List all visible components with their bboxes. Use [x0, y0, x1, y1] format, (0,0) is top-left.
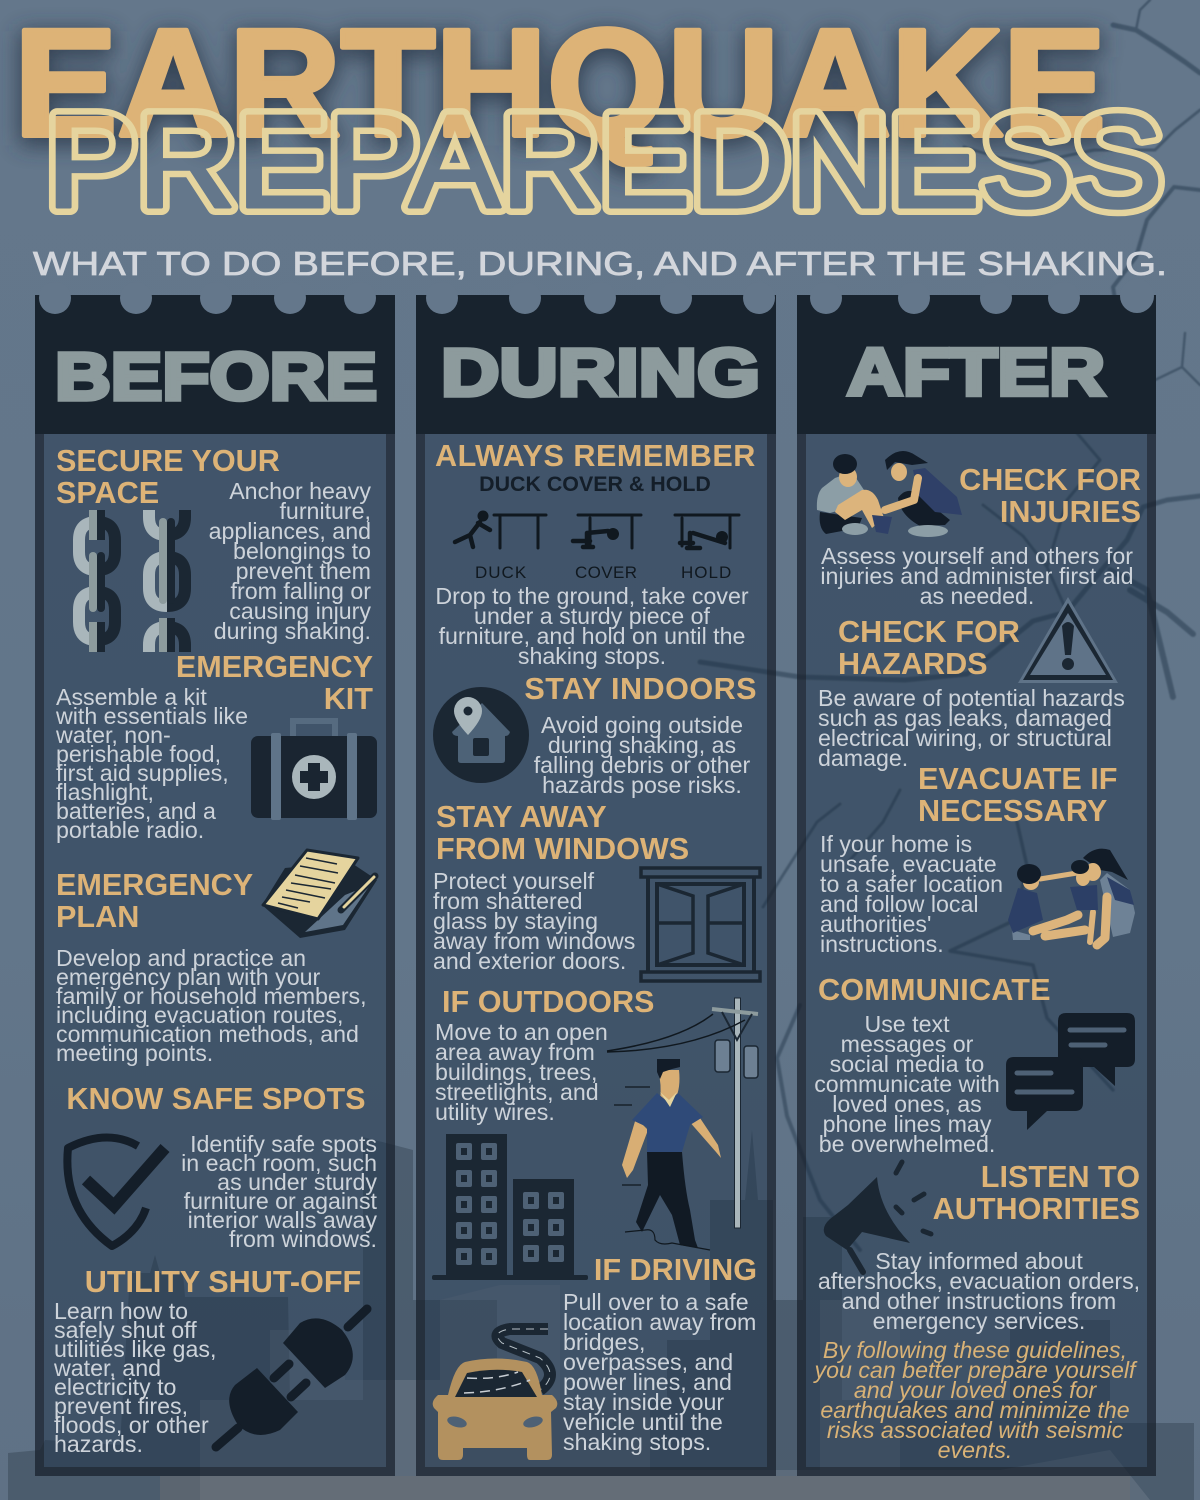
text: emergency plan: including evacuation routes, [56, 1002, 343, 1028]
text: stay indoors: Avoid going outside [541, 712, 743, 738]
text: communicate: Use text [864, 1011, 950, 1037]
text: communicate: phone lines may [823, 1111, 991, 1137]
heading: check for injuries [959, 463, 1141, 529]
text: secure your space [209, 478, 371, 644]
text: listen to authorities: emergency services. [873, 1308, 1085, 1334]
label: cover: COVER [575, 563, 637, 582]
text: know safe spots [181, 1130, 377, 1252]
text: check for injuries: as needed. [920, 583, 1034, 609]
text: if driving: stay inside your [563, 1389, 724, 1415]
icon: open window [639, 866, 762, 983]
text: emergency plan: communication methods, and [56, 1020, 359, 1046]
heading: emergency kit: KIT [324, 682, 373, 716]
text: evacuate if necessary: If your home is [820, 831, 972, 857]
icon: chains [73, 510, 191, 652]
heading: utility shut-off: UTILITY SHUT-OFF [85, 1265, 361, 1299]
text: emergency kit: first aid supplies, [56, 760, 229, 786]
text: evacuate if necessary: unsafe, evacuate [820, 851, 997, 877]
text: communicate [797, 1014, 1017, 1154]
heading: if driving: IF DRIVING [594, 1253, 757, 1287]
icon: warning triangle [1018, 597, 1118, 683]
text: if outdoors: Move to an open [435, 1019, 608, 1045]
text: emergency kit: batteries, and a [56, 798, 216, 824]
text: evacuate if necessary: authorities' [820, 911, 931, 937]
text: if outdoors: area away from [435, 1039, 595, 1065]
heading: emergency plan: PLAN [56, 900, 139, 934]
text: utility shut-off: floods, or other [54, 1412, 209, 1438]
text: check for injuries: injuries and administer first aid [820, 563, 1134, 589]
text: closing note: By following these guidelines, [823, 1337, 1127, 1363]
text: stay away from windows: glass by staying [433, 908, 598, 934]
text: if outdoors [435, 1019, 608, 1125]
text: check for hazards: Be aware of potential hazards [818, 685, 1125, 711]
text: if outdoors: streetlights, and [435, 1079, 599, 1105]
text: utility shut-off: water, and [54, 1354, 161, 1380]
text: emergency kit: flashlight, [56, 778, 154, 804]
heading: check for injuries: INJURIES [1000, 495, 1141, 529]
text: if outdoors: buildings, trees, [435, 1059, 597, 1085]
heading: emergency plan: EMERGENCY [56, 868, 253, 902]
text: duck cover and hold [435, 583, 749, 669]
text: if driving: overpasses, and [563, 1349, 733, 1375]
text: listen to authorities: Stay informed about [875, 1248, 1083, 1274]
label: hold: HOLD [681, 563, 732, 582]
icon: chat bubbles [1006, 1013, 1136, 1131]
label: duck: DUCK [475, 563, 527, 582]
illustration: person walking past utility pole [607, 998, 759, 1251]
heading: check for injuries: CHECK FOR [959, 463, 1141, 497]
text: secure your space: causing injury [229, 598, 371, 624]
text: duck cover and hold: Drop to the ground, take cover [435, 583, 749, 609]
text: if driving: power lines, and [563, 1369, 732, 1395]
text: utility shut-off: hazards. [54, 1430, 143, 1456]
column heading: AFTER: AFTER [847, 335, 1105, 410]
heading: secure your space [56, 444, 280, 510]
panel: after [797, 295, 1156, 1476]
heading: listen to authorities [933, 1161, 1140, 1225]
heading: stay away from windows: FROM WINDOWS [436, 832, 689, 866]
text: evacuate if necessary [820, 834, 1003, 954]
text: emergency kit: Assemble a kit [56, 684, 207, 710]
text: if driving [563, 1289, 756, 1455]
heading: evacuate if necessary: NECESSARY [918, 794, 1107, 828]
text: stay away from windows [433, 868, 635, 974]
text: know safe spots: in each room, such [181, 1150, 377, 1176]
panel: during [416, 295, 776, 1476]
heading: if outdoors: IF OUTDOORS [442, 985, 654, 1019]
text: communicate: loved ones, as [832, 1091, 982, 1117]
heading: EARTHQUAKE: EARTHQUAKE [14, 3, 1106, 174]
text: if outdoors: utility wires. [435, 1099, 555, 1125]
text: if driving: shaking stops. [563, 1429, 711, 1455]
text: check for injuries: Assess yourself and others for [821, 543, 1133, 569]
text: emergency plan: Develop and practice an [56, 944, 306, 970]
heading: evacuate if necessary [918, 762, 1117, 828]
text: emergency plan: meeting points. [56, 1040, 213, 1066]
text: if driving: vehicle until the [563, 1409, 723, 1435]
text: stay indoors: during shaking, as [548, 732, 736, 758]
icon: shield check [63, 1134, 170, 1250]
text: stay away from windows: and exterior doors. [433, 948, 626, 974]
text: utility shut-off: electricity to [54, 1374, 176, 1400]
heading: emergency kit: EMERGENCY [176, 650, 373, 684]
text: utility shut-off: prevent fires, [54, 1392, 188, 1418]
icon: first aid kit [251, 718, 377, 820]
text: stay away from windows: Protect yourself [433, 868, 594, 894]
icon: car on winding road [432, 1323, 558, 1460]
heading: check for hazards [838, 615, 1020, 681]
heading: check for hazards: HAZARDS [838, 647, 988, 681]
heading: evacuate if necessary: EVACUATE IF [918, 762, 1117, 796]
text: communicate: social media to [830, 1051, 984, 1077]
text: if driving: Pull over to a safe [563, 1289, 749, 1315]
text: secure your space: belongings to [233, 538, 371, 564]
heading: emergency kit [176, 650, 373, 716]
text: closing note: risks associated with seismic [827, 1417, 1123, 1443]
icon: megaphone [822, 1158, 932, 1276]
subheading: duck cover and hold: DUCK COVER & HOLD [479, 472, 711, 496]
heading: secure your space: SPACE [56, 476, 159, 510]
text: closing note: earthquakes and minimize the [820, 1397, 1130, 1423]
text: listen to authorities: aftershocks, evacuation orders, [818, 1268, 1140, 1294]
heading: secure your space: SECURE YOUR [56, 444, 280, 478]
heading: know safe spots: KNOW SAFE SPOTS [66, 1082, 366, 1116]
heading: always remember: ALWAYS REMEMBER [435, 439, 756, 473]
text: check for hazards: damage. [818, 745, 908, 771]
heading: listen to authorities: AUTHORITIES [933, 1192, 1140, 1226]
text: evacuate if necessary: instructions. [820, 931, 944, 957]
panel: before [35, 295, 395, 1476]
man [614, 1059, 721, 1250]
text: stay indoors: falling debris or other [534, 752, 750, 778]
heading: stay away from windows: STAY AWAY [436, 800, 607, 834]
text: evacuate if necessary: and follow local [820, 891, 979, 917]
heading: check for hazards: CHECK FOR [838, 615, 1020, 649]
text: if driving: location away from [563, 1309, 756, 1335]
heading: PREPAREDNESS: PREPAREDNESS [46, 88, 1163, 235]
heading: stay indoors: STAY INDOORS [524, 672, 757, 706]
text: communicate: communicate with [814, 1071, 1000, 1097]
text: utility shut-off: Learn how to [54, 1298, 188, 1324]
utility pole [607, 998, 758, 1228]
column heading: DURING [416, 295, 776, 434]
title [8, 0, 1165, 216]
icon: city buildings [432, 1134, 588, 1280]
column heading: AFTER [797, 295, 1156, 434]
heading: communicate: COMMUNICATE [818, 973, 1051, 1007]
subtitle: WHAT TO DO BEFORE, DURING, AND AFTER THE SHAKING. [33, 245, 1167, 282]
text: emergency kit [56, 684, 248, 843]
text: utility shut-off: utilities like gas, [54, 1336, 216, 1362]
text: check for injuries [820, 543, 1134, 609]
text: duck cover and hold: shaking stops. [518, 643, 666, 669]
text: secure your space: from falling or [231, 578, 371, 604]
text: communicate: messages or [841, 1031, 973, 1057]
text: stay indoors [534, 712, 750, 798]
text: know safe spots: from windows. [229, 1226, 377, 1252]
text: evacuate if necessary: to a safer location [820, 871, 1003, 897]
text: know safe spots: as under sturdy [217, 1168, 377, 1194]
illustration: family comforting children [1007, 848, 1137, 948]
text: secure your space: during shaking. [214, 618, 371, 644]
column heading: DURING: DURING [441, 336, 760, 410]
heading: listen to authorities: LISTEN TO [981, 1160, 1140, 1194]
text: check for hazards [818, 685, 1125, 771]
text: emergency kit: with essentials like [56, 702, 248, 728]
text: communicate: be overwhelmed. [819, 1131, 995, 1157]
icon: unplugged plug [212, 1304, 372, 1452]
text: know safe spots: Identify safe spots [190, 1130, 377, 1156]
text: secure your space: prevent them [236, 558, 371, 584]
text: listen to authorities [809, 1251, 1149, 1331]
text: closing note: and your loved ones for [854, 1377, 1096, 1403]
text: secure your space: Anchor heavy [229, 478, 371, 504]
text: check for hazards: such as gas leaks, damaged [818, 705, 1112, 731]
text: know safe spots: furniture or against [184, 1188, 377, 1214]
heading: emergency plan [56, 868, 253, 934]
icon: plan document and pen [262, 848, 378, 938]
text: if driving: bridges, [563, 1329, 646, 1355]
text: emergency kit: portable radio. [56, 816, 204, 842]
illustration: people treating injury [816, 451, 962, 537]
text: emergency plan: emergency plan with your [56, 964, 320, 990]
text: utility shut-off: safely shut off [54, 1316, 197, 1342]
text: duck cover and hold: furniture, and hold on until the [439, 623, 745, 649]
text: closing note: you can better prepare yourself [815, 1357, 1135, 1383]
text: secure your space: appliances, and [209, 518, 371, 544]
heading: EARTHQUAKE: EARTHQUAKE [14, 0, 1106, 168]
icon: house with location pin [433, 687, 529, 783]
text: duck cover and hold: under a sturdy piece of [474, 603, 710, 629]
text: know safe spots: interior walls away [188, 1206, 377, 1232]
text: closing note [805, 1340, 1145, 1460]
text: utility shut-off [54, 1298, 216, 1456]
text: secure your space: furniture, [279, 498, 371, 524]
column heading: BEFORE [35, 295, 395, 434]
text: emergency plan: family or household members, [56, 982, 367, 1008]
icon: duck cover hold figures [452, 510, 740, 550]
text: stay away from windows: away from windows [433, 928, 635, 954]
text: listen to authorities: and other instructions from [842, 1288, 1116, 1314]
text: stay away from windows: from shattered [433, 888, 582, 914]
text: emergency kit: water, non- [56, 722, 171, 748]
text: emergency kit: perishable food, [56, 740, 221, 766]
text: closing note: events. [938, 1437, 1012, 1463]
text: stay indoors: hazards pose risks. [542, 772, 742, 798]
column heading: BEFORE: BEFORE [55, 340, 377, 414]
text: check for hazards: electrical wiring, or structural [818, 725, 1112, 751]
heading: stay away from windows [436, 800, 689, 866]
text: emergency plan [56, 944, 367, 1066]
background city skyline [8, 1133, 1194, 1500]
